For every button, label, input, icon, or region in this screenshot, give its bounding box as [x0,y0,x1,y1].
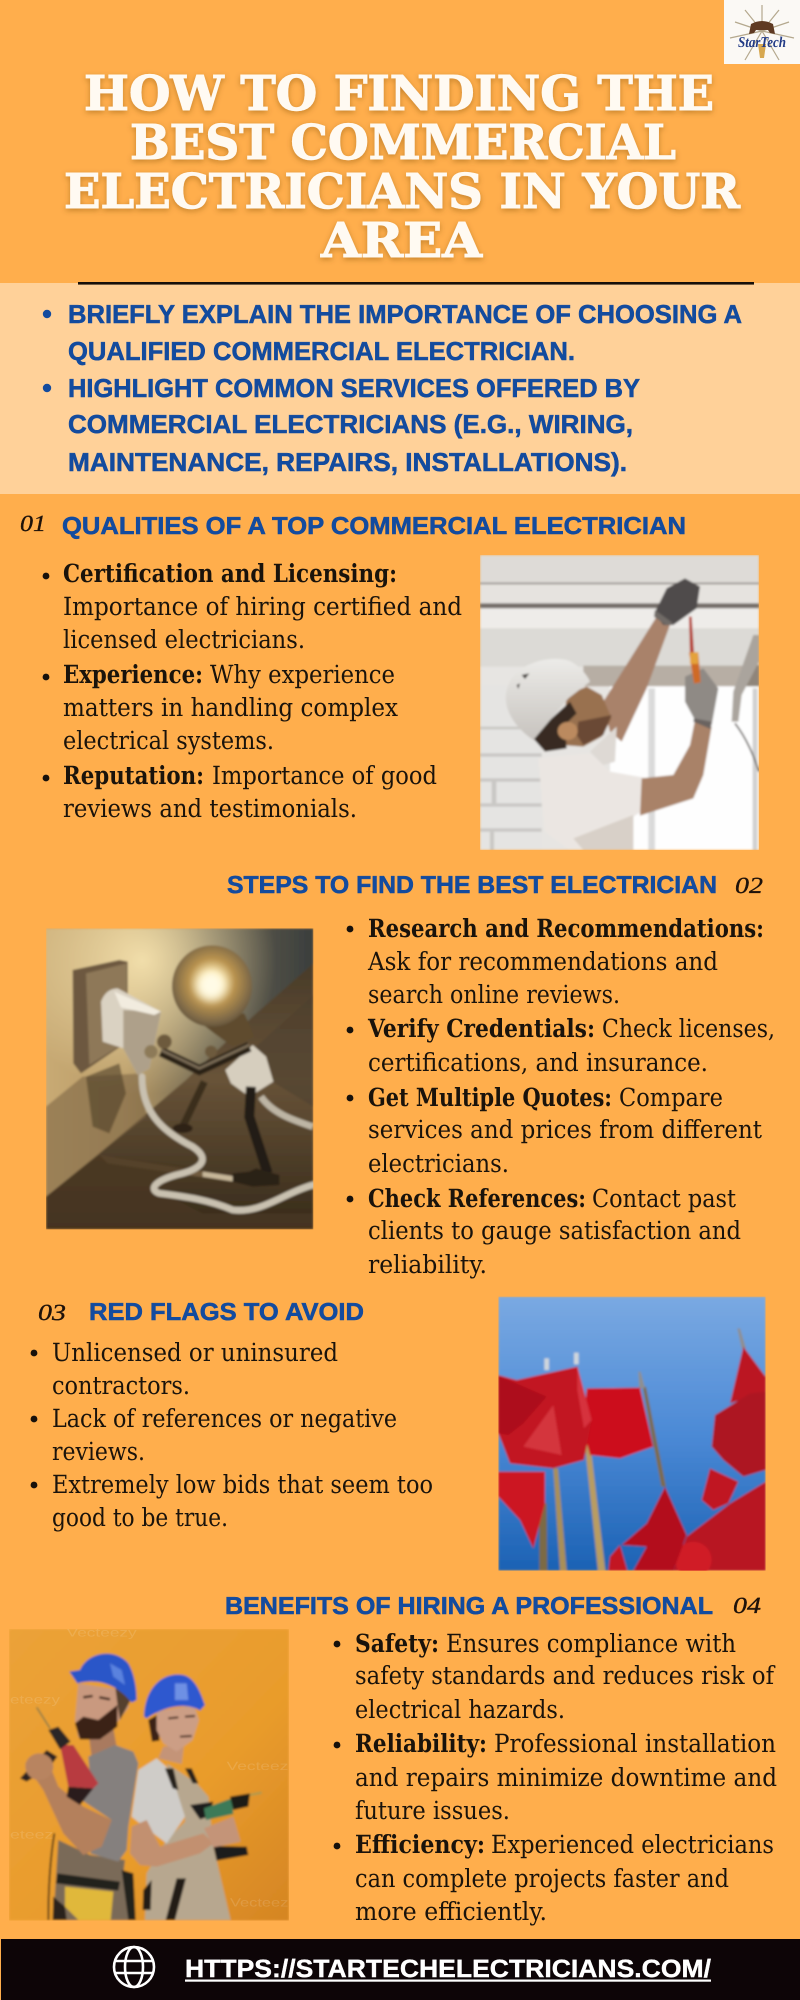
section 03 bullet list: contractors. [52,1371,190,1400]
section 02 bullet list: Get Multiple Quotes: [368,1083,612,1112]
panel: introduction: QUALIFIED COMMERCIAL ELECTRICIAN. [68,336,575,366]
section 04 bullet list: Safety: [355,1629,439,1658]
section 02 bullet list: electricians. [368,1149,509,1178]
section 04 bullet list: Ensures compliance with [446,1629,736,1658]
section 01 bullet list: matters in handling complex [63,693,398,722]
section 01 bullet list: Certification and Licensing: [63,559,397,588]
section 04 bullet list: Efficiency: [355,1830,485,1859]
section 01 bullet list: Why experience [210,660,395,689]
section 01 bullet list: Reputation: [63,761,204,790]
section 04 bullet list: and repairs minimize downtime and [355,1763,777,1792]
section 02 bullet list: reliability. [368,1250,487,1279]
panel: introduction: COMMERCIAL ELECTRICIANS (E.G., WIRING, [68,409,633,439]
section 02 bullet list: search online reviews. [368,980,620,1009]
section 02 heading: 02 [735,873,763,898]
section 01 bullet list: licensed electricians. [63,625,305,654]
section 04 bullet list: Experienced electricians [491,1830,774,1859]
section 04 bullet list: future issues. [355,1796,510,1825]
panel: introduction [0,282,800,494]
section 02 bullet list: clients to gauge satisfaction and [368,1216,741,1245]
section 04 bullet list: can complete projects faster and [355,1864,729,1893]
section 04 bullet list: Reliability: [355,1729,487,1758]
section 04 bullet list: more efficiently. [355,1897,547,1926]
section 03 heading: RED FLAGS TO AVOID [89,1299,364,1326]
section 01 bullet list [43,559,462,823]
photo: two electricians with drills: eteez [10,1827,53,1841]
photo: two electricians with drills [9,1626,289,1921]
section 04 bullet list [334,1629,777,1926]
section 02 heading: STEPS TO FIND THE BEST ELECTRICIAN [227,872,717,899]
section 01 bullet list: electrical systems. [63,726,274,755]
section 02 bullet list: Compare [619,1083,723,1112]
section 02 bullet list: Contact past [592,1184,736,1213]
title: HOW TO FINDING THE [84,66,714,122]
photo: two electricians with drills: Vecteez [230,1896,288,1909]
logo: StarTech [738,35,786,51]
section 04 heading: 04 [733,1593,761,1618]
photo: light bulb robot plugging in [46,928,313,1229]
section 03 heading: 03 [38,1300,66,1325]
section 01 bullet list: Experience: [63,660,203,689]
title: ELECTRICIANS IN YOUR [64,164,741,220]
section 04 bullet list: electrical hazards. [355,1695,565,1724]
title: BEST COMMERCIAL [130,115,676,171]
footer bar [1,1939,800,2000]
section 01 bullet list: reviews and testimonials. [63,794,357,823]
panel: introduction: HIGHLIGHT COMMON SERVICES OFFERED BY [68,373,640,403]
title: AREA [320,213,483,269]
title [64,66,741,269]
section 04 heading: BENEFITS OF HIRING A PROFESSIONAL [225,1593,713,1620]
logo [724,0,800,64]
section 03 bullet list: Extremely low bids that seem too [52,1470,433,1499]
section 03 bullet list: reviews. [52,1437,145,1466]
section 02 bullet list: services and prices from different [368,1115,762,1144]
panel: introduction: BRIEFLY EXPLAIN THE IMPORTANCE OF CHOOSING A [68,299,742,329]
section 03 bullet list: Unlicensed or uninsured [52,1338,338,1367]
section 01 bullet list: Importance of hiring certified and [63,592,462,621]
section 03 bullet list: Lack of references or negative [52,1404,397,1433]
section 02 bullet list [347,914,775,1279]
section 02 bullet list: Check References: [368,1184,586,1213]
photo: two electricians with drills: eteezy [10,1692,60,1706]
section 02 bullet list: Ask for recommendations and [367,947,718,976]
photo: red flags against blue sky [498,1297,766,1578]
section 02 bullet list: Verify Credentials: [367,1014,595,1043]
section 02 bullet list: Check licenses, [602,1014,775,1043]
section 01 bullet list: Importance of good [212,761,437,790]
section 03 bullet list: good to be true. [52,1503,228,1532]
section 03 bullet list [31,1338,433,1532]
section 02 bullet list: certifications, and insurance. [368,1048,708,1077]
panel: introduction: MAINTENANCE, REPAIRS, INSTALLATIONS). [68,447,627,477]
section 01 heading: QUALITIES OF A TOP COMMERCIAL ELECTRICIAN [62,513,686,540]
icon: globe [114,1947,154,1987]
section 01 heading: 01 [20,511,46,536]
photo: two electricians with drills: Vecteez [227,1759,288,1773]
footer bar: HTTPS://STARTECHELECTRICIANS.COM/ [185,1955,711,1983]
photo: electrician at ceiling [480,555,759,850]
section 04 bullet list: Professional installation [494,1729,776,1758]
photo: two electricians with drills: Vecteezy [67,1626,137,1639]
